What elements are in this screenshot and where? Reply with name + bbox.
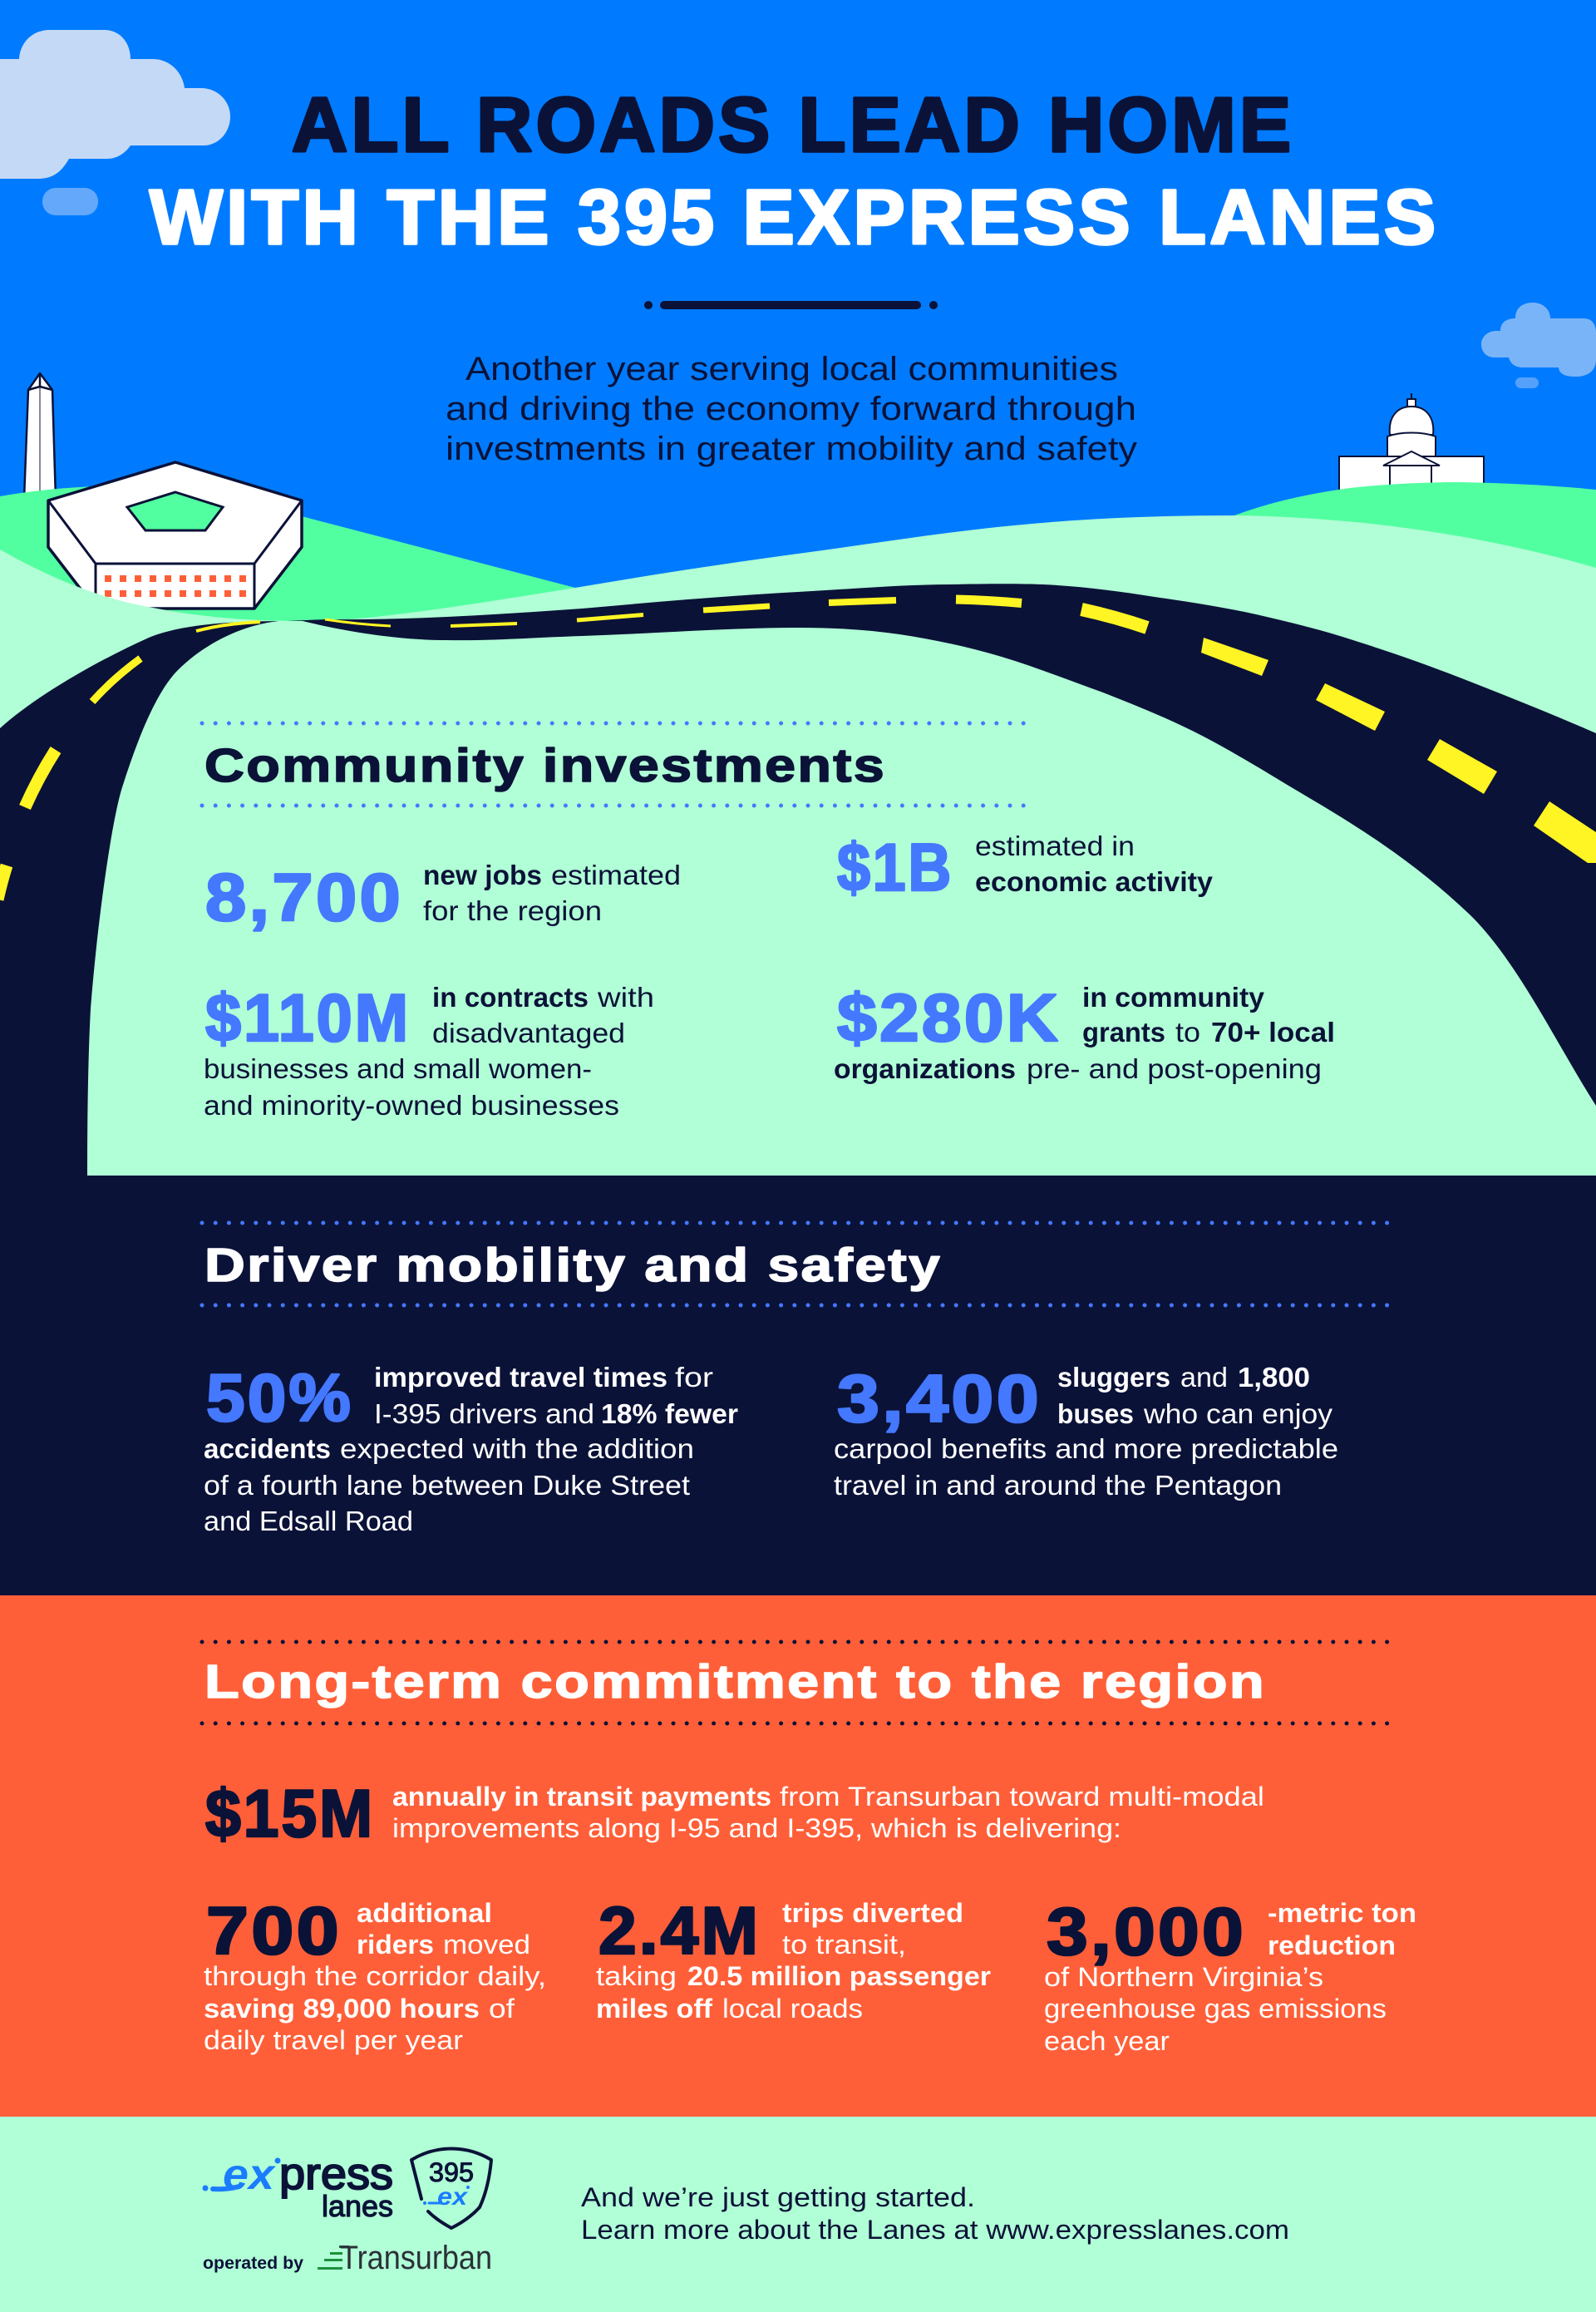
logo: Transurban: Transurban bbox=[340, 2240, 492, 2276]
stat: 3,400 sluggers: 3,400 bbox=[837, 1362, 1042, 1437]
stat: 700 riders: riders bbox=[357, 1930, 434, 1960]
stat: $110M contracts: disadvantaged bbox=[432, 1018, 625, 1048]
stat: 50% travel times: and Edsall Road bbox=[204, 1506, 413, 1536]
stat: 2.4M trips: miles off bbox=[596, 1994, 712, 2024]
stat: $280K grants: pre- and post-opening bbox=[1027, 1053, 1322, 1084]
logo: express lanes bbox=[203, 2149, 393, 2223]
stat: 3,000 metric tons: reduction bbox=[1268, 1930, 1396, 1960]
stat: 8,700 new jobs: estimated bbox=[551, 860, 681, 890]
stat: 8,700 new jobs bbox=[205, 860, 681, 935]
stat: 3,400 sluggers: buses bbox=[1057, 1398, 1134, 1429]
panel: driver mobility and safety bbox=[0, 1176, 1596, 1595]
stat: 8,700 new jobs: 8,700 bbox=[205, 860, 403, 935]
road bbox=[0, 584, 1596, 1176]
icon: Pentagon building bbox=[48, 462, 302, 609]
stat: 3,400 sluggers: carpool benefits and more predictable bbox=[834, 1433, 1338, 1464]
stat: 700 riders: additional bbox=[357, 1898, 492, 1928]
stat: $15M transit payments: from Transurban toward multi-modal bbox=[780, 1782, 1264, 1812]
stat: 3,400 sluggers: and bbox=[1180, 1362, 1228, 1393]
operated by label: operated by bbox=[203, 2254, 303, 2273]
stat: 50% travel times: I-395 drivers and bbox=[374, 1398, 594, 1429]
stat: $15M transit payments: improvements along I-95 and I-395, which is delivering: bbox=[392, 1813, 1121, 1843]
stat: $1B economic activity: estimated in bbox=[975, 831, 1135, 861]
mint foreground hills bbox=[0, 515, 1596, 1176]
panel: footer bbox=[0, 2117, 1596, 2312]
stat: $110M contracts: and minority-owned businesses bbox=[204, 1090, 619, 1121]
icon: Capitol building bbox=[1339, 393, 1484, 499]
intro text bbox=[446, 351, 1137, 467]
panel: long-term commitment bbox=[0, 1595, 1596, 2117]
stat: 700 riders: 700 bbox=[206, 1894, 342, 1969]
stat: $280K grants: to bbox=[1175, 1017, 1200, 1048]
stat: 700 riders: saving 89,000 hours bbox=[204, 1994, 480, 2024]
stat: 8,700 new jobs: new jobs bbox=[423, 860, 542, 890]
stat: $110M contracts: $110M bbox=[205, 981, 411, 1056]
stat: $280K grants: 70+ local bbox=[1211, 1017, 1335, 1048]
stat: 700 riders: moved bbox=[443, 1930, 530, 1960]
panel: community investments bbox=[202, 723, 1335, 1121]
title divider bbox=[644, 301, 938, 309]
stat: 50% travel times: of a fourth lane between Duke Street bbox=[204, 1470, 690, 1501]
title: WITH THE 395 EXPRESS LANES bbox=[150, 174, 1436, 260]
stat: 2.4M trips: local roads bbox=[722, 1994, 863, 2024]
icon: large cloud upper left bbox=[0, 30, 230, 215]
title: ALL ROADS LEAD HOME bbox=[292, 81, 1291, 168]
stat: 3,000 metric tons: of Northern Virginia’s bbox=[1044, 1962, 1323, 1992]
stat: 3,400 sluggers bbox=[834, 1362, 1338, 1501]
stat: $280K grants: in community bbox=[1082, 982, 1265, 1013]
stat: $280K grants bbox=[834, 981, 1335, 1084]
driver heading bbox=[202, 1223, 1388, 1305]
long-term heading: Long-term commitment to the region bbox=[204, 1655, 1266, 1708]
stat: $15M transit payments: annually in transit payments bbox=[392, 1782, 771, 1812]
stat: $110M contracts: businesses and small women- bbox=[204, 1053, 592, 1084]
icon: Washington Monument bbox=[24, 373, 56, 499]
long-term heading bbox=[202, 1642, 1388, 1723]
community heading: Community investments bbox=[204, 739, 886, 792]
stat: 700 riders: of bbox=[489, 1994, 515, 2024]
stat: 50% travel times: expected with the addition bbox=[340, 1433, 694, 1464]
stat: $15M transit payments bbox=[205, 1777, 1264, 1851]
intro text: and driving the economy forward through bbox=[446, 391, 1136, 427]
stat: $280K grants: organizations bbox=[834, 1053, 1016, 1084]
logo: 395 ex shield bbox=[411, 2148, 491, 2228]
closing text bbox=[581, 2182, 1289, 2245]
stat: 3,000 metric tons: each year bbox=[1044, 2026, 1170, 2056]
stat: 2.4M trips bbox=[596, 1894, 991, 2024]
stat: 2.4M trips: taking bbox=[596, 1961, 677, 1991]
closing text: And we’re just getting started. bbox=[581, 2182, 975, 2212]
stat: 3,000 metric tons: greenhouse gas emissions bbox=[1044, 1994, 1387, 2024]
stat: 700 riders: daily travel per year bbox=[204, 2025, 463, 2055]
stat: $15M transit payments: $15M bbox=[205, 1777, 375, 1851]
road centre dashes bbox=[0, 599, 1596, 900]
stat: 50% travel times: 18% fewer bbox=[601, 1398, 738, 1429]
logo: 395 ex shield: 395 bbox=[429, 2157, 474, 2187]
driver heading: Driver mobility and safety bbox=[204, 1239, 942, 1292]
stat: 3,000 metric tons: 3,000 bbox=[1047, 1895, 1246, 1969]
stat: 3,000 metric tons bbox=[1044, 1895, 1416, 2056]
stat: 700 riders: through the corridor daily, bbox=[204, 1961, 546, 1991]
stat: 50% travel times: accidents bbox=[204, 1433, 331, 1464]
right green hill bbox=[1234, 482, 1596, 582]
stat: 3,400 sluggers: sluggers bbox=[1057, 1362, 1170, 1393]
stat: $1B economic activity: economic activity bbox=[975, 866, 1214, 897]
closing text: Learn more about the Lanes at www.expresslanes.com bbox=[581, 2215, 1289, 2245]
logo: express lanes: ex bbox=[223, 2151, 276, 2199]
stat: 50% travel times: 50% bbox=[206, 1361, 353, 1436]
stat: $110M contracts: with bbox=[597, 982, 654, 1013]
stat: $280K grants: $280K bbox=[837, 981, 1061, 1056]
intro text: investments in greater mobility and safety bbox=[446, 431, 1137, 467]
logo: 395 ex shield: ex bbox=[437, 2183, 468, 2211]
stat: 50% travel times: for bbox=[675, 1362, 713, 1393]
stat: 2.4M trips: 2.4M bbox=[598, 1894, 761, 1969]
stat: $110M contracts bbox=[204, 981, 654, 1121]
sky background bbox=[0, 0, 1596, 831]
logo: express lanes: press bbox=[279, 2149, 393, 2199]
stat: 3,400 sluggers: 1,800 bbox=[1238, 1362, 1310, 1393]
logo: express lanes: lanes bbox=[322, 2189, 393, 2223]
stat: $1B economic activity bbox=[837, 831, 1214, 905]
stat: $110M contracts: in contracts bbox=[432, 982, 589, 1013]
icon: small cloud upper right bbox=[1481, 303, 1596, 388]
stat: $280K grants: grants bbox=[1082, 1017, 1165, 1048]
stat: 3,000 metric tons: -metric ton bbox=[1268, 1898, 1416, 1928]
stat: 50% travel times bbox=[204, 1361, 738, 1536]
stat: 2.4M trips: to transit, bbox=[782, 1930, 906, 1960]
stat: 3,400 sluggers: who can enjoy bbox=[1143, 1398, 1333, 1429]
stat: 8,700 new jobs: for the region bbox=[423, 895, 602, 926]
left green hill bbox=[0, 486, 575, 640]
stat: 50% travel times: improved travel times bbox=[374, 1362, 667, 1393]
intro text: Another year serving local communities bbox=[466, 351, 1118, 387]
stat: 2.4M trips: trips diverted bbox=[782, 1898, 963, 1928]
stat: 700 riders bbox=[204, 1894, 546, 2055]
stat: $1B economic activity: $1B bbox=[837, 831, 953, 905]
title bbox=[150, 81, 1436, 260]
community heading bbox=[202, 723, 1029, 806]
stat: 3,400 sluggers: travel in and around the Pentagon bbox=[834, 1470, 1282, 1501]
stat: 2.4M trips: 20.5 million passenger bbox=[687, 1961, 991, 1991]
